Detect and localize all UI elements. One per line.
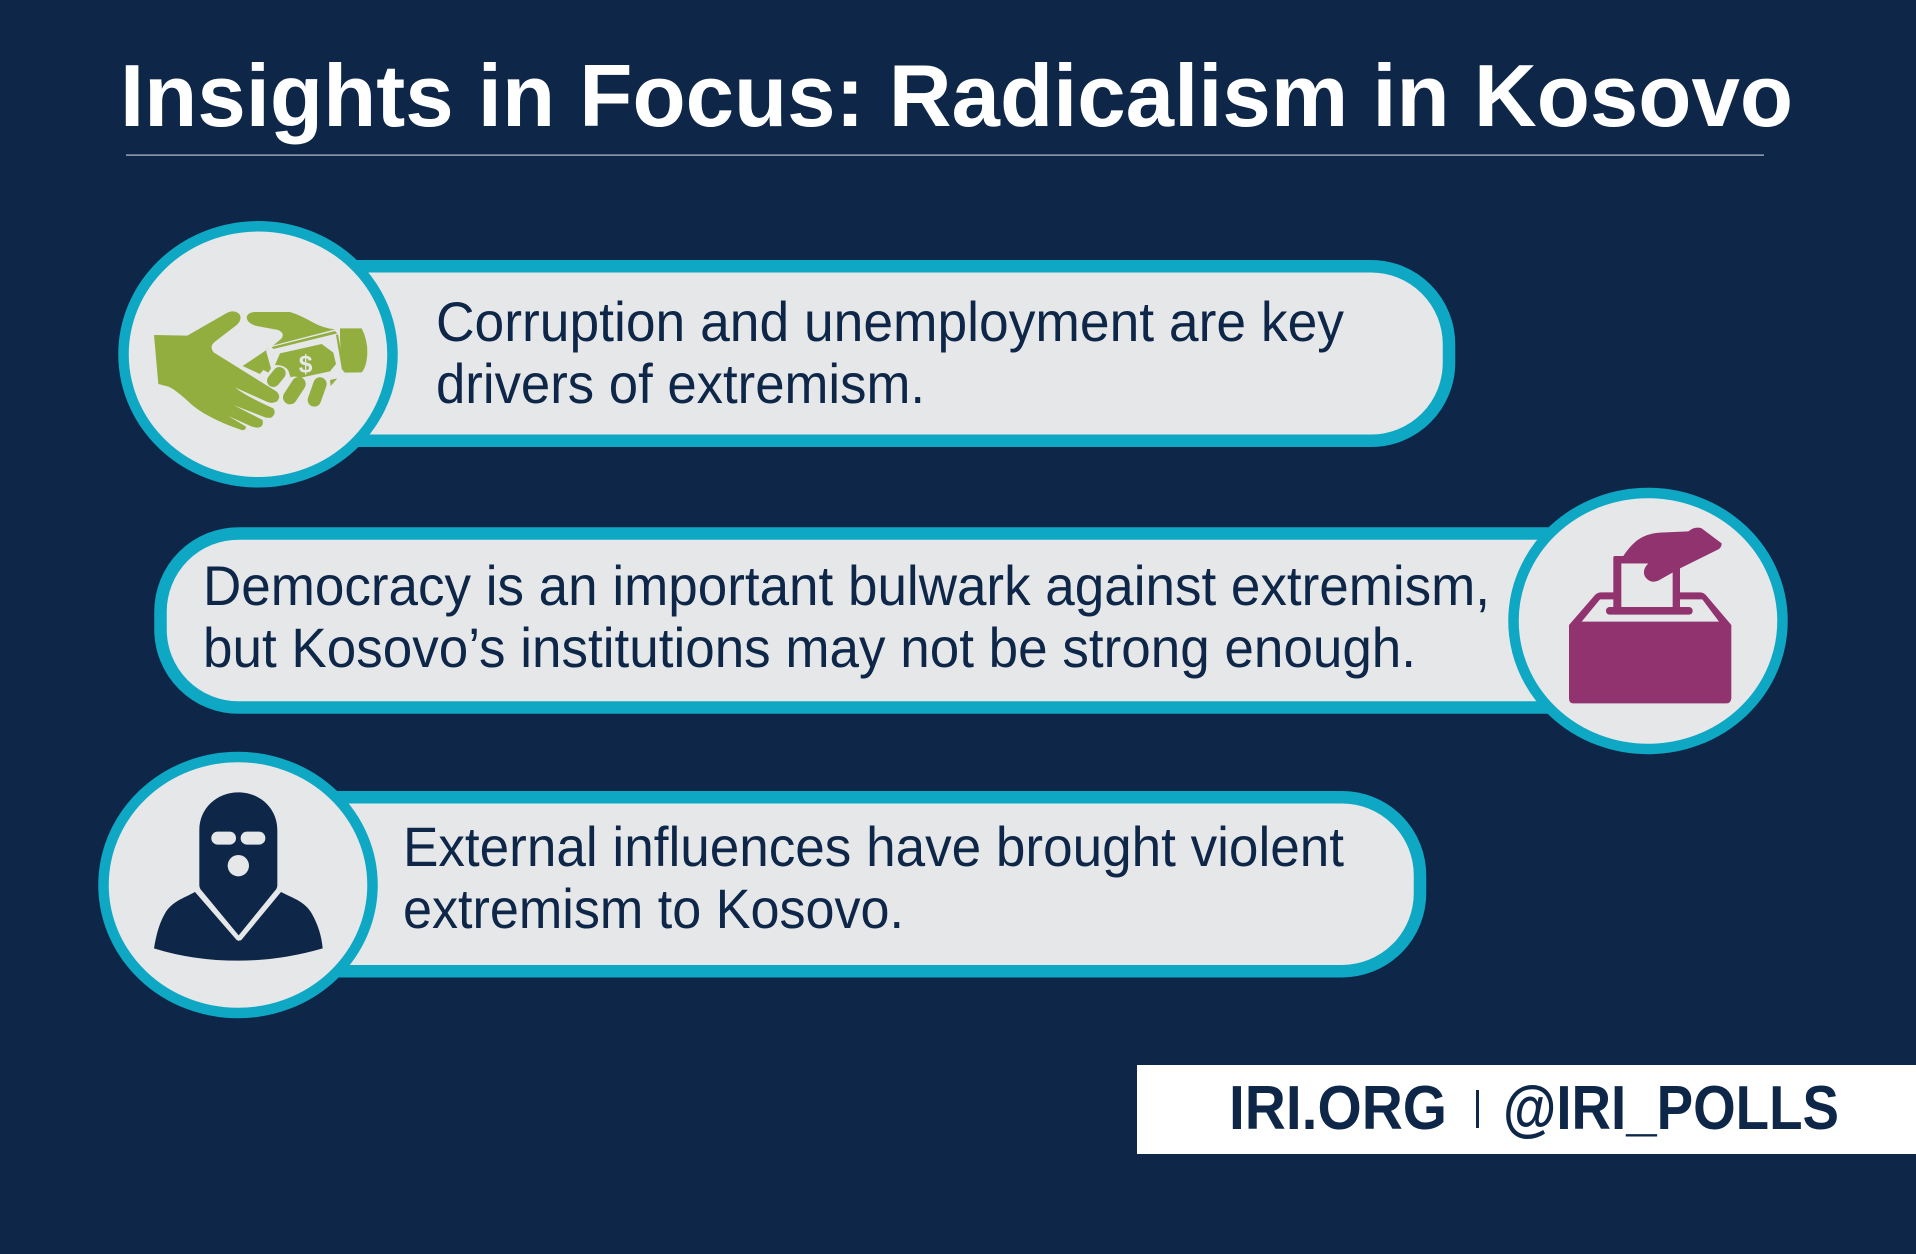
icon: handshake with money: $ [299,352,313,379]
text: corruption statement: Corruption and unemployment are key [436,290,1344,353]
icon: masked figure [154,792,323,961]
text: democracy statement: but Kosovo’s institutions may not be strong enough. [203,616,1416,679]
text: democracy statement: Democracy is an important bulwark against extremism, [203,554,1490,617]
footer: web and social handles: IRI.ORG [1229,1074,1447,1143]
text: corruption statement: drivers of extremism. [436,352,925,415]
text: external influences statement: extremism to Kosovo. [403,877,904,940]
icon: handshake with money [154,311,367,430]
panel: external influences [104,757,1420,1013]
circle badge [104,757,372,1013]
text: external influences statement: External influences have brought violent [403,815,1344,878]
icon: ballot box [1569,528,1731,703]
title: Insights in Focus: Radicalism in Kosovo [120,46,1793,145]
text: democracy statement [203,554,1490,679]
text: external influences statement [403,815,1344,940]
circle badge [124,226,392,482]
pill background [150,797,1420,971]
panel: corruption and unemployment [124,226,1449,482]
footer: web and social handles: @IRI_POLLS [1503,1074,1839,1143]
panel: democracy and institutions [160,493,1782,749]
pill background [170,266,1449,441]
circle badge [1514,493,1782,749]
text: corruption statement [436,290,1344,415]
pill background [160,534,1760,708]
footer: web and social handles [1137,1065,1916,1154]
